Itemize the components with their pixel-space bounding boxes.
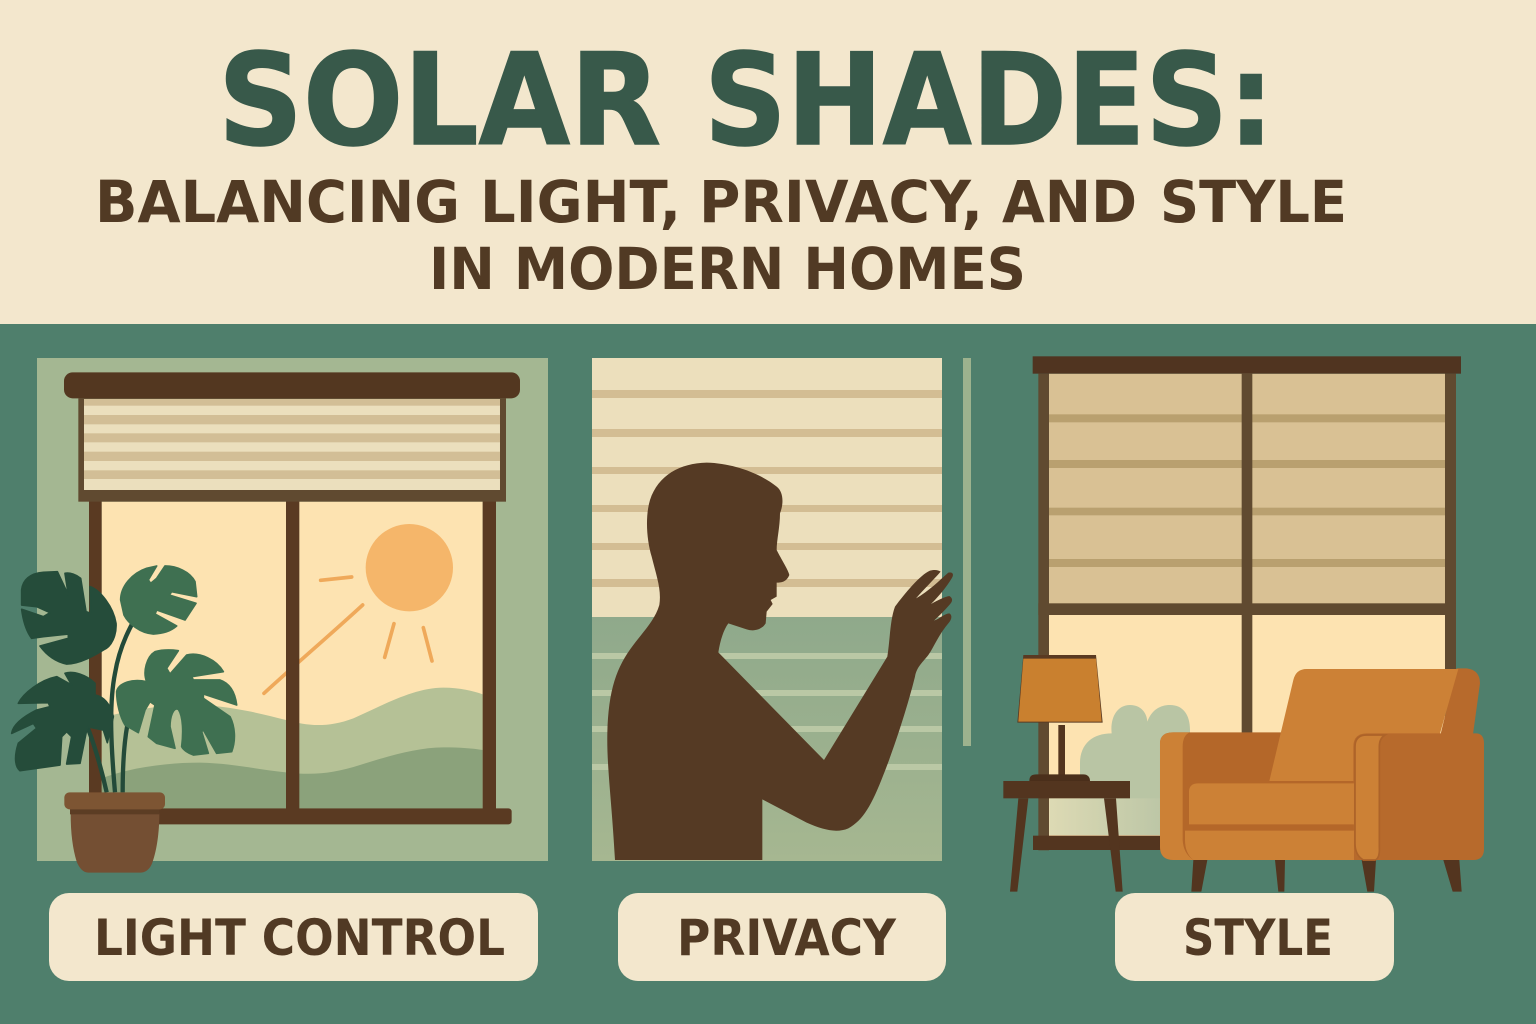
label: light control: LIGHT CONTROL: [94, 909, 505, 967]
lower slats: [592, 653, 942, 770]
window frame: [89, 500, 512, 824]
label: privacy: [618, 893, 946, 981]
window sky: [102, 502, 483, 808]
pot: [71, 813, 159, 873]
furniture group: [1003, 655, 1484, 892]
window illustration: [64, 372, 520, 824]
back front: [1269, 669, 1458, 781]
label: style: [1115, 893, 1394, 981]
leaves: [12, 566, 237, 771]
subtitle line 2: IN MODERN HOMES: [429, 235, 1026, 303]
panel: light control: [12, 358, 548, 873]
legs: [1191, 860, 1462, 892]
panel: style: [1003, 356, 1484, 892]
icon: armchair: [1160, 668, 1484, 892]
pull cord: [963, 358, 971, 746]
window sill: [1033, 836, 1166, 850]
subtitle line 1: BALANCING: [95, 168, 460, 236]
header band: [0, 0, 1536, 324]
label: light control: [49, 893, 538, 981]
icon: side table: [1003, 781, 1130, 892]
subtitle line 1: LIGHT,: [480, 168, 681, 236]
subtitle line 1: [95, 168, 1347, 236]
subtitle line 1: STYLE: [1160, 168, 1347, 236]
icon: potted monstera plant: [12, 566, 237, 873]
lower view: [592, 617, 942, 861]
window pane: [1049, 615, 1445, 837]
silhouette of person: [607, 463, 953, 860]
subtitle line 1: PRIVACY,: [699, 168, 983, 236]
label: style: STYLE: [1183, 909, 1333, 967]
roman shade: [1033, 356, 1461, 850]
icon: table lamp: [1017, 655, 1103, 781]
shade slats: [592, 390, 942, 587]
arm front: [1355, 735, 1385, 860]
left arm: [1160, 732, 1193, 860]
panel: privacy: [592, 358, 971, 861]
rolled shade: [64, 372, 520, 502]
body base: [1160, 732, 1367, 860]
back: [1440, 668, 1480, 737]
bush: [1049, 705, 1190, 835]
right arm: [1353, 733, 1484, 860]
window frame: [1038, 374, 1456, 850]
title: [218, 26, 1274, 174]
label: privacy: PRIVACY: [677, 909, 897, 967]
hills: [102, 688, 483, 808]
title: SHADES:: [704, 26, 1274, 174]
title: SOLAR: [218, 26, 661, 174]
stems: [87, 622, 133, 792]
cushion: [1189, 783, 1354, 824]
subtitle line 1: AND: [1002, 168, 1137, 236]
icon: sun: [264, 524, 453, 693]
